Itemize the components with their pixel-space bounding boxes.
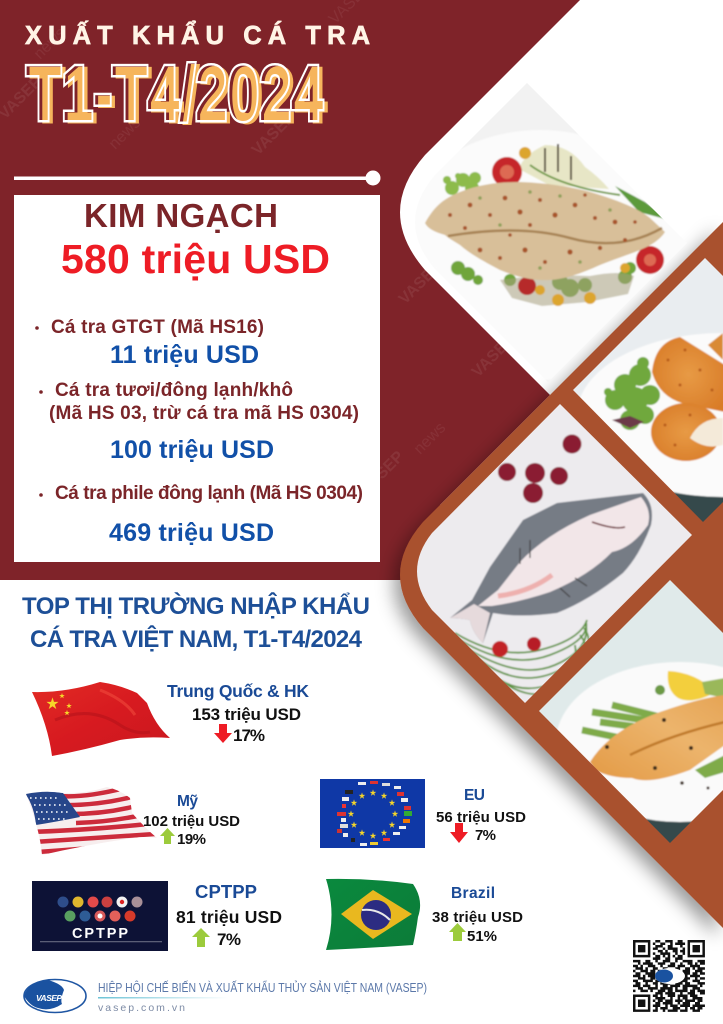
watermark: VASEP news: news [106,114,144,153]
market: Brazil: 51% [467,928,497,945]
market: CPTPP: CPTPP [195,881,257,902]
photo: grilled fillet with lemon [535,578,723,846]
market: China: 153 triệu USD [192,705,301,724]
logo: CPTPP: CPTPP [72,926,128,942]
market: USA [26,787,240,855]
market: EU: 56 triệu USD [436,809,526,826]
flag: EU: ★ [370,832,376,840]
heading: top markets: CÁ TRA VIỆT NAM, T1-T4/2024 [30,625,363,653]
red header background [0,0,580,580]
heading: T1-T4/2024 [24,61,328,125]
item: value added: Cá tra GTGT (Mã HS16) [51,317,264,338]
market: China [32,681,309,756]
arrow down [214,724,232,743]
item: frozen fillet: 469 triệu USD [109,519,274,547]
panel: export value [14,195,380,562]
photo: whole pangasius fish [417,404,692,703]
flag: China: ★ [66,703,72,710]
heading: top markets: TOP THỊ TRƯỜNG NHẬP KHẨU [22,592,370,620]
logo: VASEP: VASEP [36,993,62,1003]
watermark: VASEP news [0,0,519,483]
item: fresh frozen dried [39,380,359,464]
item: fresh frozen dried: (Mã HS 03, trừ cá tra mã HS 0304) [49,403,359,424]
flag: Brazil [326,878,420,950]
market: Brazil [326,878,522,950]
market: USA: 19% [177,831,206,848]
item: fresh frozen dried: Cá tra tươi/đông lạnh/khô [55,380,293,401]
market: CPTPP: 7% [217,930,241,949]
flag: USA [26,787,156,855]
item: fresh frozen dried: 100 triệu USD [110,436,274,464]
flag: EU: ★ [380,792,388,800]
market: Brazil: 38 triệu USD [432,909,523,926]
watermark: VASEP news: VASEP [396,258,446,308]
flag: China: ★ [64,710,70,717]
item: value added [35,317,264,369]
market: China: Trung Quốc & HK [167,681,309,701]
heading: top markets [22,592,370,653]
logo: CPTPP [32,881,168,951]
market: CPTPP [32,881,282,951]
arrow up [449,923,466,941]
market: EU [320,779,526,848]
market: China: 17% [233,726,265,745]
photo: fillet on plate [424,84,666,307]
flag: EU: ★ [392,810,398,818]
flag: EU: ★ [350,799,358,807]
flag: EU [320,779,425,848]
brown diamond frame [400,222,723,928]
watermark: VASEP news: VASEP [249,109,299,159]
watermark: VASEP news: SEP [373,448,408,483]
total label: KIM NGẠCH [84,197,278,234]
flag: EU: ★ [388,821,396,829]
heading: xuất khẩu cá tra: XUẤT KHẨU CÁ TRA [25,21,370,50]
photo: breaded fish nuggets [570,255,723,528]
flag: EU: ★ [348,810,354,818]
market: EU: EU [464,787,485,804]
watermark: VASEP news: news [411,419,449,458]
flag: EU: ★ [350,821,358,829]
flag: China: ★ [46,696,59,711]
flag: EU: ★ [388,799,396,807]
footer text [98,980,427,1014]
flag: China [32,682,170,756]
flag: EU: ★ [358,792,366,800]
logo: VASEP [24,980,86,1012]
flag: EU: ★ [370,789,376,797]
footer text: vasep.com.vn [98,1002,185,1014]
flag: EU: ★ [358,829,366,837]
market: Brazil: Brazil [451,885,495,902]
slider line [14,170,380,186]
item: frozen fillet [39,483,363,547]
market: CPTPP: 81 triệu USD [176,907,282,927]
market: EU: 7% [475,827,496,844]
heading: T1-T4/2024: T1-T4/2024 [30,51,327,139]
item: frozen fillet: Cá tra phile đông lạnh (Mã HS 0304) [55,483,363,504]
market: USA: 102 triệu USD [143,813,240,830]
footer text: HIỆP HỘI CHẾ BIẾN VÀ XUẤT KHẨU THỦY SẢN VIỆT NAM (VASEP) [98,980,427,995]
flag: EU: ★ [380,829,388,837]
watermark: VASEP news: news [31,24,69,63]
watermark: VASEP news: VASEP [469,331,519,381]
flag: China: ★ [59,693,65,700]
total value: 580 triệu USD [61,236,330,282]
arrow down [450,823,468,843]
arrow up [192,928,210,947]
QR code [633,941,705,1011]
arrow up [160,828,175,844]
item: value added: 11 triệu USD [110,341,259,369]
market: USA: Mỹ [177,793,198,810]
stems [455,620,589,694]
